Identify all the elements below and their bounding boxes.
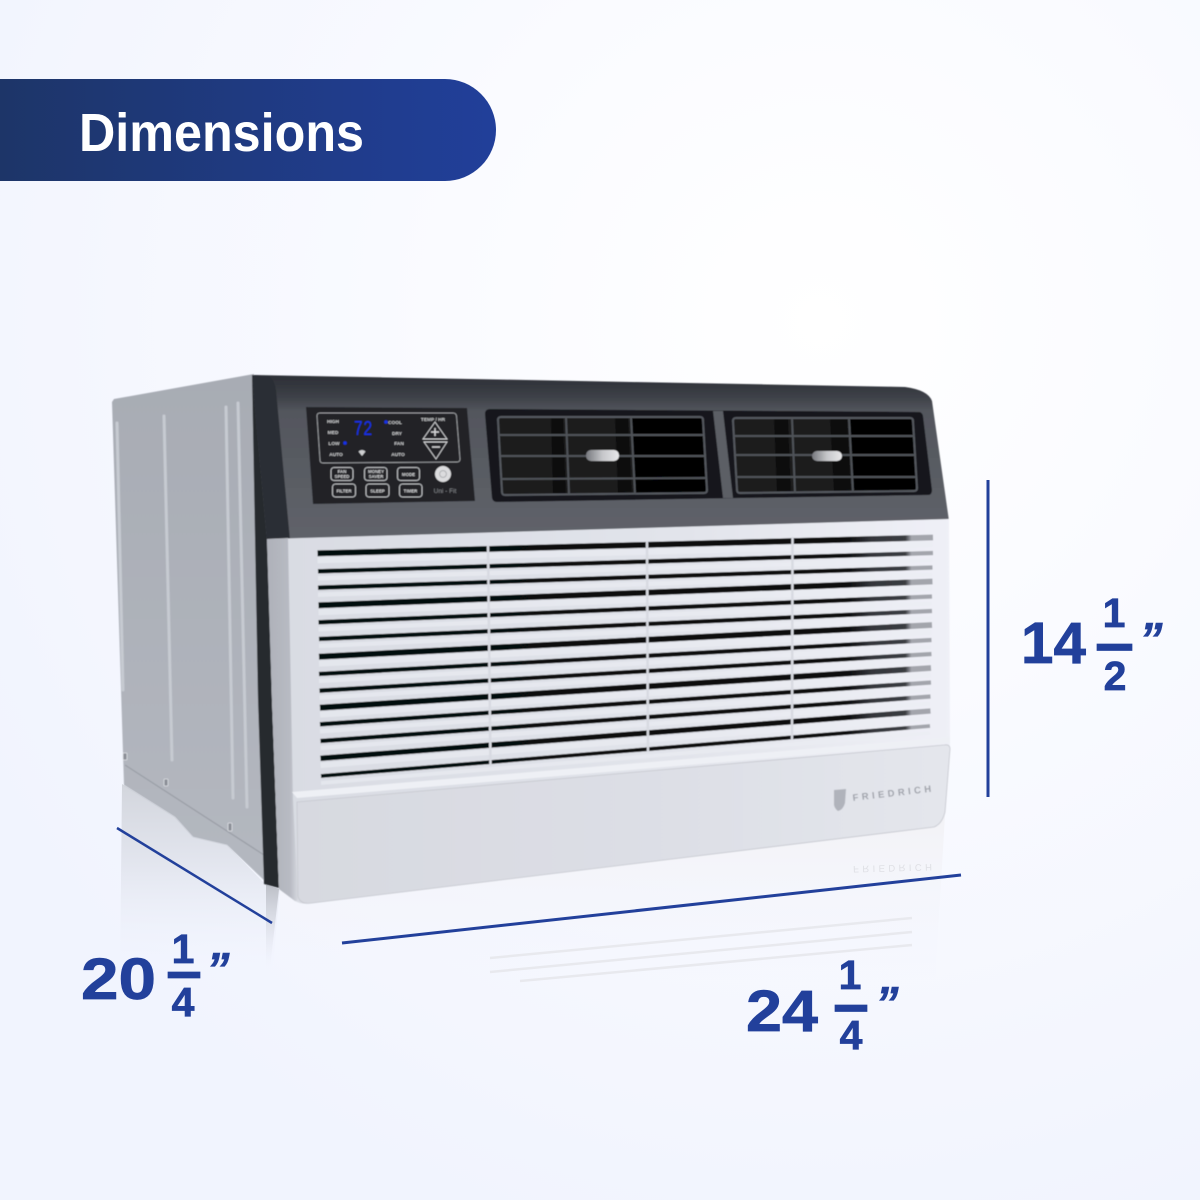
width line (342, 875, 961, 943)
reflection: mirrored louvers (490, 918, 912, 981)
width value: ” (876, 977, 898, 1029)
display labels: COOL (388, 420, 402, 426)
screws (123, 753, 232, 831)
button labels (335, 469, 418, 494)
right vent knob (812, 451, 842, 461)
button labels: MONEY (368, 469, 384, 474)
reflection: dark strip streak (266, 885, 279, 968)
display labels: AUTO (391, 452, 405, 458)
brand text: FRIEDRICH (852, 783, 935, 804)
button labels: MODE (402, 472, 415, 477)
louver highlights (318, 544, 933, 783)
icon: brand logo (834, 789, 846, 811)
height line (986, 480, 990, 797)
display outline (317, 413, 460, 463)
height value: 14 (1021, 611, 1086, 676)
height value: 1 (1103, 590, 1125, 636)
dimension: height (988, 480, 1162, 797)
width value: 4 (840, 1012, 863, 1058)
dark edge strip (252, 375, 279, 888)
buttons (331, 468, 422, 497)
reflection: front (280, 815, 945, 985)
vent housing (485, 409, 932, 502)
height value: ” (1140, 613, 1162, 665)
heading: Dimensions: Dimensions (79, 103, 364, 163)
depth value: 4 (172, 979, 195, 1025)
button labels: TIMER (404, 488, 418, 494)
width value: 24 (746, 979, 818, 1044)
louver slots (318, 538, 933, 776)
dimension: depth (81, 828, 272, 1025)
display labels: AUTO (329, 452, 343, 458)
reflection: side (120, 784, 280, 975)
display labels: FAN (394, 441, 404, 447)
button labels: SLEEP (370, 488, 385, 494)
width value: 1 (839, 952, 861, 998)
lower panel (297, 745, 950, 903)
display labels: LOW (328, 441, 340, 447)
display labels: TEMP / HR (421, 417, 446, 423)
display labels (327, 417, 446, 458)
display labels: DRY (392, 431, 403, 437)
display labels: HIGH (327, 419, 340, 425)
depth value: ” (206, 943, 230, 995)
left return band (267, 538, 298, 901)
control panel (306, 407, 475, 504)
reflection: mirrored brand text: FRIEDRICH (853, 861, 936, 874)
depth value (81, 926, 230, 1025)
model label: Uni - Fit (434, 488, 457, 495)
depth value: 1 (172, 926, 194, 972)
indicator dots (343, 420, 388, 445)
icon: wifi (358, 450, 366, 456)
lower panel ledge (292, 737, 950, 798)
casing ribs (117, 403, 247, 807)
air conditioner (112, 374, 950, 904)
display labels: MED (328, 430, 339, 436)
front white cover (267, 519, 950, 904)
button labels: FILTER (336, 488, 352, 494)
casing crease (125, 765, 264, 855)
width value (746, 952, 898, 1058)
floor reflection of air conditioner (120, 784, 945, 985)
temperature readout: 72 (354, 419, 372, 442)
louver dividers (488, 537, 792, 766)
temperature arrows (423, 422, 447, 459)
left vent knob (586, 450, 619, 461)
vent divider (713, 411, 733, 498)
dimension: width (342, 875, 961, 1058)
top control housing (252, 375, 949, 541)
button labels: FAN (338, 469, 346, 474)
header banner (0, 79, 496, 181)
height value: 2 (1104, 653, 1126, 699)
height value (1021, 590, 1162, 699)
button labels: SAVER (369, 474, 384, 479)
button labels: SPEED (335, 474, 349, 479)
left vent (498, 417, 707, 495)
depth value: 20 (81, 947, 156, 1012)
depth line (117, 828, 272, 923)
right vent (733, 418, 917, 493)
side casing (112, 374, 268, 884)
icon: power button (435, 466, 451, 482)
